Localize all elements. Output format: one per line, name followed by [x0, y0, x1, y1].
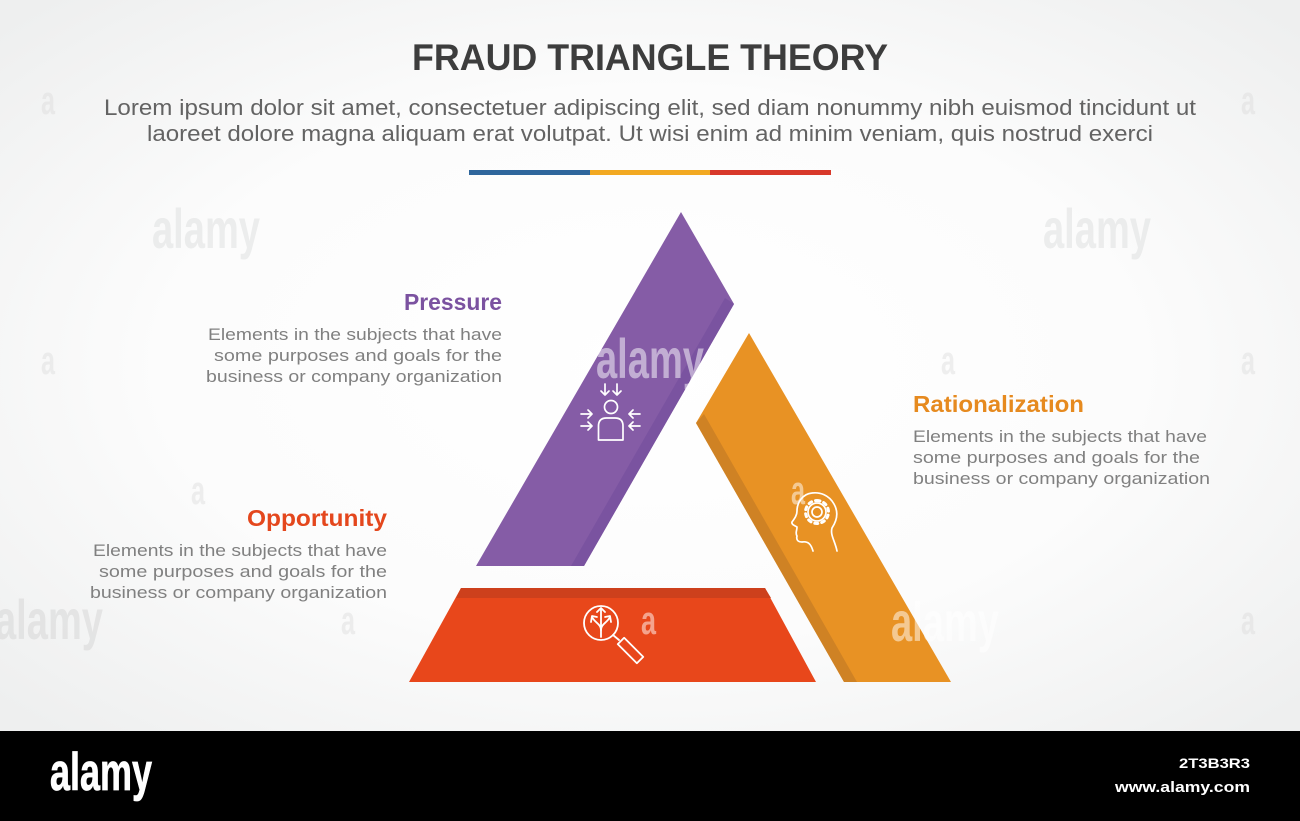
label: opportunity	[90, 505, 387, 602]
label: rationalization: some purposes and goals for the	[913, 448, 1200, 467]
stock watermarks: a	[791, 469, 805, 513]
image id and site: 2T3B3R3	[1179, 755, 1250, 771]
stock watermarks: alamy	[891, 590, 999, 653]
image id and site	[1114, 755, 1250, 796]
label: rationalization: Elements in the subjects that have	[913, 427, 1207, 446]
stock watermarks: a	[341, 599, 355, 643]
label: opportunity: Opportunity	[247, 505, 387, 531]
stock watermarks: a	[1241, 339, 1255, 383]
stock watermarks: a	[641, 599, 657, 643]
stock watermarks: alamy	[596, 327, 704, 390]
stock watermarks: a	[191, 469, 205, 513]
stock watermarks: alamy	[152, 197, 260, 260]
footer bar	[0, 731, 1300, 821]
triangle segment: rationalization	[696, 333, 951, 682]
stock watermarks: alamy	[1043, 197, 1151, 260]
intro text block	[104, 95, 1197, 146]
image id and site: www.alamy.com	[1114, 779, 1250, 796]
label: pressure: business or company organization	[206, 367, 502, 386]
label: pressure: Elements in the subjects that have	[208, 325, 502, 344]
icon: magnifier with diverging arrows	[584, 606, 643, 663]
label: pressure: Pressure	[404, 289, 502, 315]
label: opportunity: business or company organization	[90, 583, 387, 602]
tricolour divider	[469, 170, 831, 175]
stock watermarks: a	[1241, 79, 1255, 123]
stock watermarks: a	[1241, 599, 1255, 643]
label: pressure	[206, 289, 502, 386]
label: opportunity: some purposes and goals for the	[99, 562, 387, 581]
label: rationalization	[913, 391, 1210, 488]
label: rationalization: business or company organization	[913, 469, 1210, 488]
triangle segment: opportunity	[409, 588, 816, 682]
label: opportunity: Elements in the subjects that have	[93, 541, 387, 560]
intro text block: laoreet dolore magna aliquam erat volutpat. Ut wisi enim ad minim veniam, quis nostrud exerci	[147, 121, 1153, 146]
title: FRAUD TRIANGLE THEORY	[412, 37, 888, 78]
footer logo: alamy	[50, 743, 152, 802]
triangle segment: pressure	[476, 212, 734, 566]
icon: person under pressure	[581, 384, 640, 440]
stock watermarks: a	[41, 339, 55, 383]
label: pressure: some purposes and goals for the	[214, 346, 502, 365]
stock watermarks	[0, 79, 1255, 653]
intro text block: Lorem ipsum dolor sit amet, consectetuer adipiscing elit, sed diam nonummy nibh euismod tincidunt ut	[104, 95, 1197, 120]
stock watermarks: a	[41, 79, 55, 123]
label: rationalization: Rationalization	[913, 391, 1084, 417]
icon: head with gear	[792, 493, 837, 551]
stock watermarks: a	[941, 339, 955, 383]
